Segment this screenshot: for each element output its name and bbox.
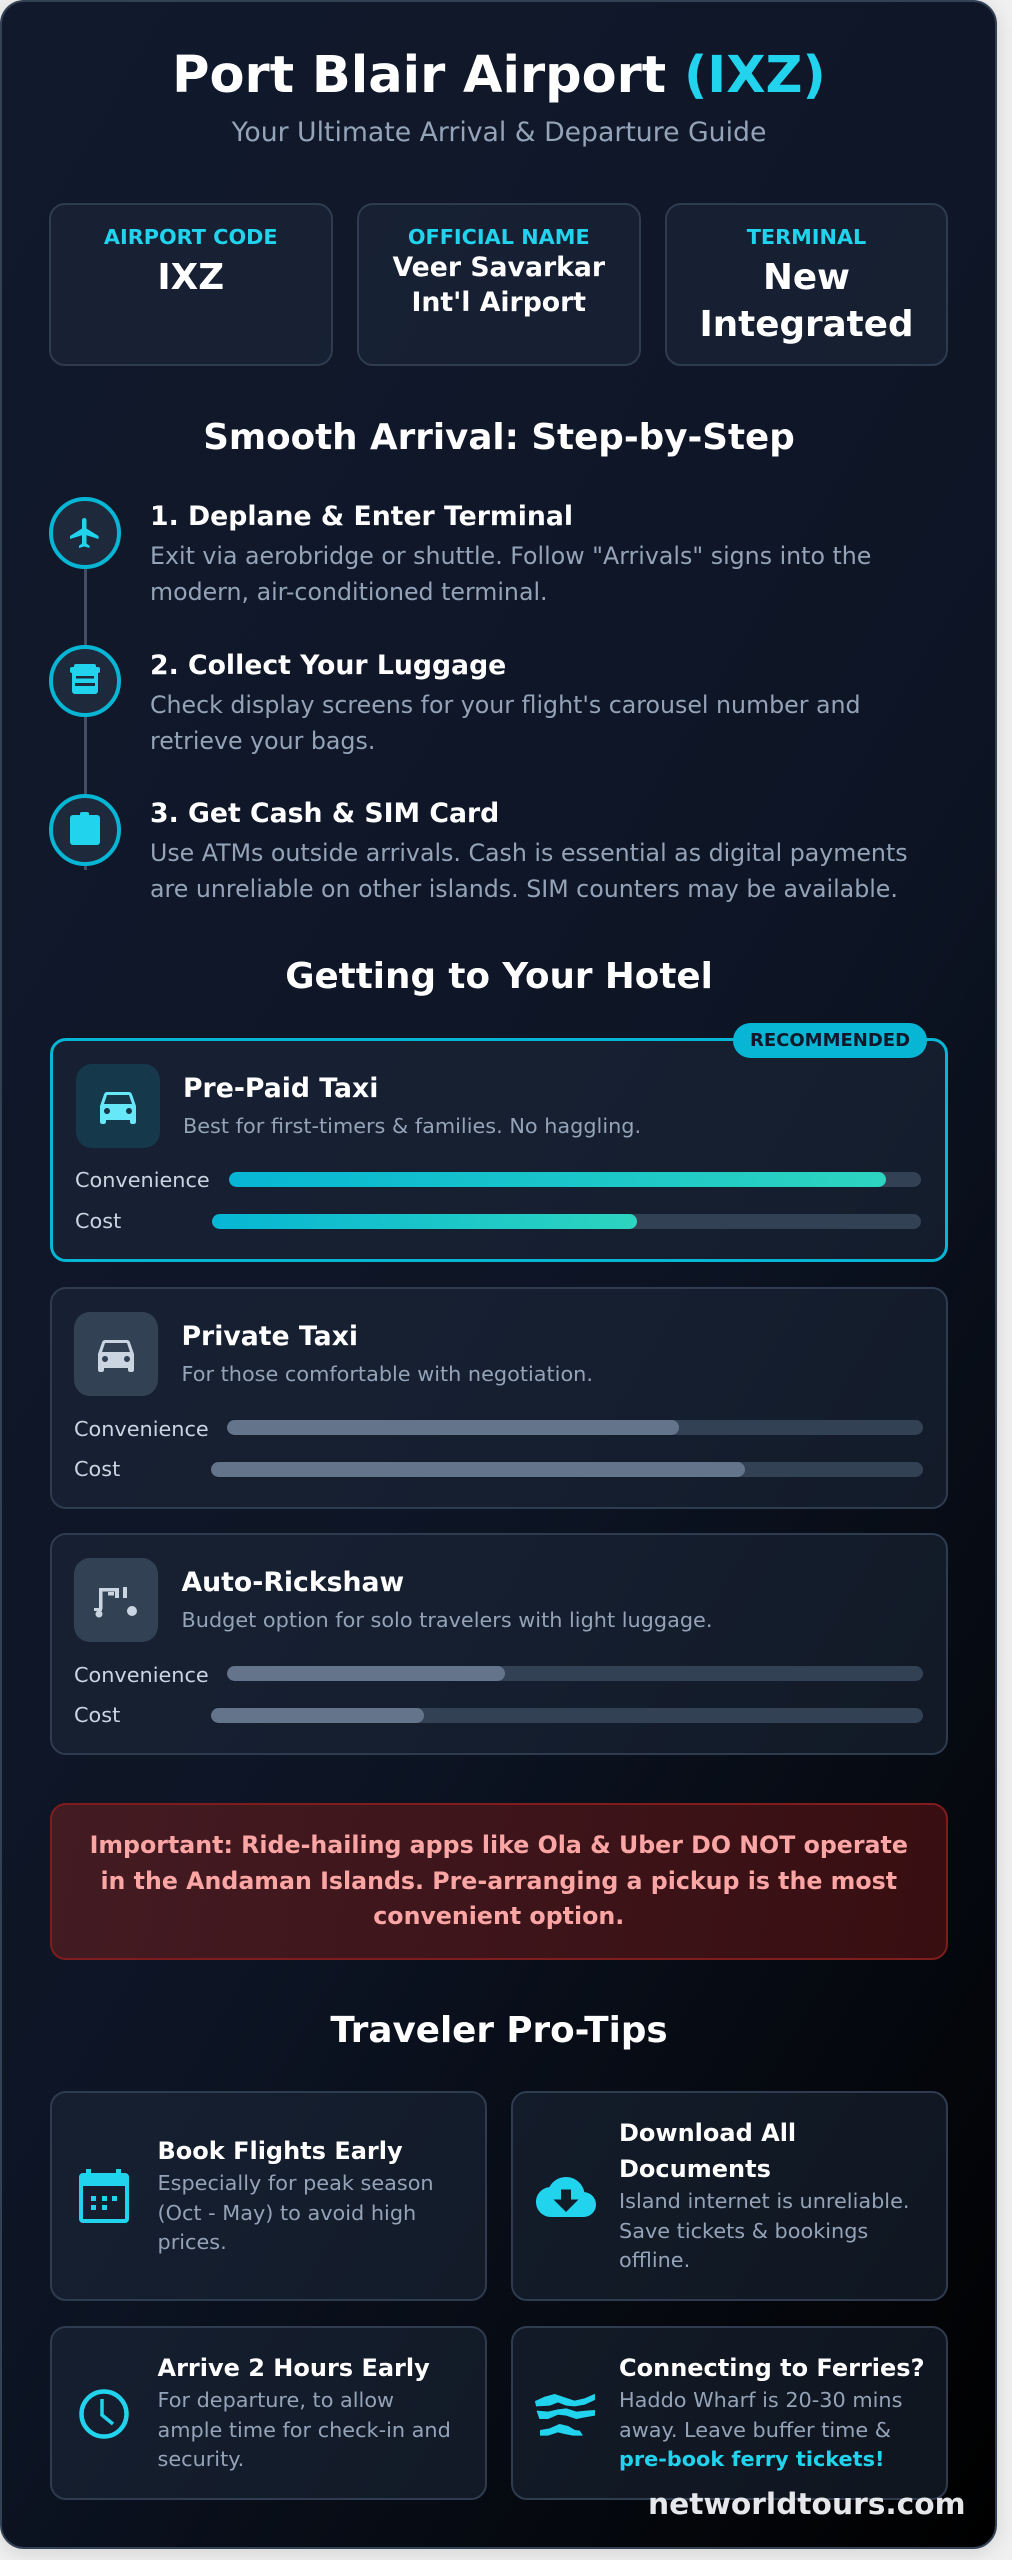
tip text: For departure, to allow [158, 2388, 394, 2412]
title: private taxi: Private Taxi [182, 1321, 358, 1352]
timeline connector 2 [84, 716, 87, 794]
value: New Integrated: New [763, 257, 850, 298]
step 2 text: Check display screens for your flight's carousel number and [150, 691, 861, 719]
tip text: away. Leave buffer time & [619, 2418, 891, 2442]
tip text: Save tickets & bookings [619, 2218, 868, 2242]
step 2 text [150, 691, 861, 755]
step 1 title: 1. Deplane & Enter Terminal [150, 501, 573, 532]
warning text: Important: Ride-hailing apps like Ola & Uber DO NOT operate [90, 1831, 908, 1859]
description: For those comfortable with negotiation. [182, 1362, 593, 1386]
panel: airport code [49, 203, 332, 366]
step 3 title: 3. Get Cash & SIM Card [150, 798, 499, 829]
step 1 text [150, 542, 871, 606]
bar: convenience 95% [228, 1172, 920, 1187]
panel: private taxi [50, 1287, 948, 1509]
heading: getting to hotel: Getting to Your Hotel [285, 956, 713, 997]
tip text: pre-book ferry tickets! [619, 2447, 884, 2471]
bar: convenience 40% [227, 1666, 923, 1681]
step 1 text: modern, air-conditioned terminal. [150, 578, 548, 606]
icon: rickshaw [74, 1558, 158, 1642]
value: IXZ: IXZ [157, 257, 224, 298]
bar: cost 30% [210, 1708, 923, 1722]
title: pre-paid taxi: Pre-Paid Taxi [183, 1073, 378, 1104]
label: cost: Cost [74, 1456, 120, 1480]
tip text [158, 2388, 451, 2471]
timeline connector 3 [84, 864, 87, 870]
panel: book flights [50, 2091, 486, 2301]
subtitle: Your Ultimate Arrival & Departure Guide [232, 117, 766, 148]
label: cost: Cost [74, 1703, 120, 1727]
tip text: Island internet is unreliable. [619, 2189, 909, 2213]
tip text: (Oct - May) to avoid high [158, 2200, 416, 2224]
icon: luggage [49, 645, 121, 717]
label: official name: OFFICIAL NAME [408, 225, 590, 249]
icon: cloud download [536, 2177, 596, 2217]
value: New Integrated [700, 257, 914, 345]
panel: auto-rickshaw [50, 1533, 948, 1755]
heading: smooth arrival: Smooth Arrival: Step-by-Step [203, 417, 795, 458]
label: airport code: AIRPORT CODE [104, 225, 278, 249]
tip text: security. [158, 2447, 244, 2471]
tip text [619, 2189, 909, 2272]
label: convenience: Convenience [74, 1416, 209, 1440]
heading: pro tips: Traveler Pro-Tips [330, 2010, 668, 2051]
icon: clock [79, 2389, 129, 2439]
tip title: Download All [619, 2119, 796, 2147]
icon: private car [74, 1312, 158, 1396]
value: Veer Savarkar: Int'l Airport [411, 287, 586, 318]
description: Best for first-timers & families. No haggling. [183, 1114, 641, 1138]
description: Budget option for solo travelers with light luggage. [182, 1608, 712, 1632]
tip text: prices. [158, 2230, 227, 2254]
badge: recommended: RECOMMENDED [750, 1030, 910, 1051]
step 1 text: Exit via aerobridge or shuttle. Follow "Arrivals" signs into the [150, 542, 871, 570]
label: convenience: Convenience [75, 1168, 210, 1192]
warning text: in the Andaman Islands. Pre-arranging a pickup is the most [100, 1866, 897, 1894]
tip text: ample time for check-in and [158, 2418, 451, 2442]
callout: important warning [50, 1803, 948, 1960]
badge: recommended [733, 1023, 927, 1058]
watermark: networldtours.com [648, 2487, 966, 2522]
tip text [158, 2171, 434, 2254]
value: Veer Savarkar: Veer Savarkar [392, 252, 605, 283]
title: Port Blair Airport (IXZ) [172, 46, 826, 105]
tip text: Especially for peak season [158, 2171, 434, 2195]
tip title: Connecting to Ferries? [619, 2354, 924, 2382]
label: convenience: Convenience [74, 1662, 209, 1686]
tip title: Documents [619, 2155, 771, 2183]
tip title [619, 2119, 796, 2183]
icon: sim card [49, 794, 121, 866]
bar: cost 75% [210, 1462, 923, 1476]
bar: cost 60% [212, 1214, 921, 1229]
step 3 text: Use ATMs outside arrivals. Cash is essential as digital payments [150, 839, 908, 867]
bar: convenience 65% [227, 1420, 923, 1435]
panel: terminal [665, 203, 948, 366]
warning text: convenient option. [373, 1902, 624, 1930]
icon: calendar [79, 2169, 129, 2223]
panel: download documents [511, 2091, 948, 2301]
tip text: offline. [619, 2248, 690, 2272]
title: auto-rickshaw: Auto-Rickshaw [182, 1567, 404, 1598]
icon: waves [535, 2394, 595, 2436]
tip text: Haddo Wharf is 20-30 mins [619, 2388, 902, 2412]
label: terminal: TERMINAL [747, 225, 866, 249]
step 3 text: are unreliable on other islands. SIM counters may be available. [150, 875, 898, 903]
step 2 title: 2. Collect Your Luggage [150, 650, 506, 681]
tip text [619, 2388, 902, 2471]
value: New Integrated: Integrated [700, 304, 914, 345]
tip title: Arrive 2 Hours Early [158, 2354, 430, 2382]
panel: arrive early [50, 2326, 486, 2500]
icon: taxi [76, 1064, 160, 1148]
timeline connector 1 [84, 568, 87, 646]
label: cost: Cost [75, 1209, 121, 1233]
icon: plane [49, 497, 121, 569]
step 2 text: retrieve your bags. [150, 727, 375, 755]
panel: official name [356, 203, 641, 366]
panel: ferries [511, 2326, 948, 2500]
panel: pre-paid taxi [50, 1038, 948, 1262]
step 3 text [150, 839, 908, 903]
tip title: Book Flights Early [158, 2137, 403, 2165]
value: Veer Savarkar [392, 252, 605, 318]
warning text [90, 1831, 908, 1930]
